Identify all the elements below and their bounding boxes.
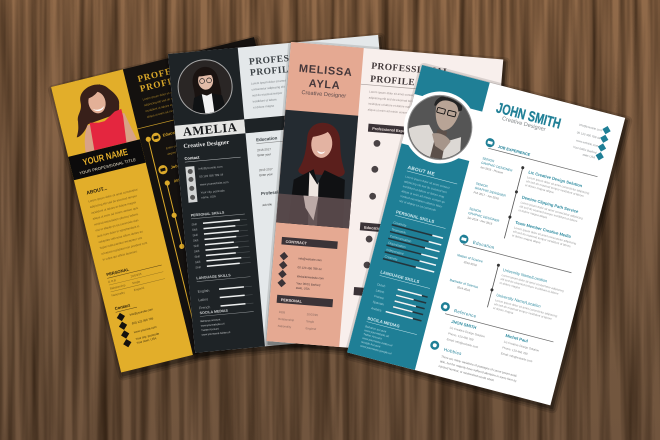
about me: nostrud exercitation ullamco labor <box>400 194 443 209</box>
about block: Lorem ipsum dolor sit amet consectetur <box>88 187 138 203</box>
contact block: (00) 123 456 789 <box>131 316 154 326</box>
timeline: 2016 <box>174 178 182 183</box>
reference block: Lic Creative Design Solution <box>503 340 540 353</box>
shadow: John Smith resume <box>349 68 627 408</box>
contact icons and text: www.website.com <box>576 138 599 148</box>
portrait: man with glasses <box>407 94 472 160</box>
timeline <box>145 127 232 344</box>
name heading: MELISSA <box>298 63 353 79</box>
contact icons and text: Your 00/01 Barford <box>573 145 597 155</box>
contact block: Your city, postcode <box>201 188 225 195</box>
shadow: Amelia resume <box>170 38 407 356</box>
personal band: 20/03/95 <box>307 312 319 317</box>
personal block: D.O.B <box>108 278 116 284</box>
about block: ABOUT... <box>86 185 109 197</box>
job timeline: Lic Creative Design Solution <box>528 169 583 188</box>
personal block: Relationship <box>109 283 126 291</box>
reference block: Phone: 123 456 789 <box>502 345 528 356</box>
about me: Lorem ipsum dolor sit amet consect <box>405 174 450 190</box>
profile heading: PROFILE <box>250 65 296 79</box>
job timeline: Lorem ipsum dolor sit amet consectetur adipiscing <box>520 200 584 221</box>
reference block: JHON SMITH <box>451 319 477 330</box>
contact icons and text: info@yoursite.com <box>579 123 603 133</box>
job timeline: elit sed do eiusmod tempor incididunt ut labore <box>519 204 578 223</box>
timeline bands and dots <box>353 124 428 300</box>
name heading: Creative Designer <box>301 90 346 100</box>
about me: aliqua ut enim ad minim veniam qu <box>401 189 446 204</box>
contact list: Website/website.com <box>297 274 325 281</box>
about block: in culpa qui officia deserunt. <box>102 249 138 262</box>
contact block: info@yoursite.com <box>198 164 223 171</box>
education block <box>256 132 322 207</box>
contract band: CONTRACT <box>285 240 308 246</box>
job timeline: Lorem ipsum dolor sit amet consectetur adipiscing <box>514 226 577 246</box>
personal skills: Skill <box>194 254 200 259</box>
contact block: 00 123 456 789 44 <box>199 172 224 179</box>
job timeline <box>464 156 592 256</box>
profile heading: consectetur adipiscing elit <box>251 85 285 92</box>
social medias <box>360 316 418 361</box>
about me <box>399 165 459 216</box>
language skills: France <box>374 294 385 300</box>
about block: adipiscing elit sed do eiusmod tempor <box>89 194 137 209</box>
profile heading: PROFILE <box>370 75 415 88</box>
language skills: Latino <box>198 297 208 302</box>
personal band <box>275 295 333 332</box>
portrait: woman in red dress <box>76 84 137 152</box>
about block: occaecat cupidatat non proident sunt <box>101 241 148 256</box>
about block <box>86 179 152 262</box>
education block: 2016-2017 <box>259 167 273 172</box>
timeline: Job <box>170 163 179 170</box>
social medias: Behance account <box>365 324 387 334</box>
profile heading: incididunt ut labore <box>252 97 277 104</box>
hobbies block <box>425 340 522 388</box>
social medias: Behance account <box>200 317 221 323</box>
shadow: Melissa resume <box>268 45 505 361</box>
about block: aute irure dolor in reprehenderit in <box>96 224 140 238</box>
job timeline: SENIOR <box>469 207 482 214</box>
teal column <box>344 64 490 370</box>
personal skills <box>383 209 447 273</box>
contact list: 00 123 456 789 44 <box>297 265 322 271</box>
personal band: Nationality <box>278 324 292 329</box>
personal skills: Teamwork <box>391 227 407 235</box>
panel: yellow resume <box>51 37 256 372</box>
contact block: www.yourwebsite.com <box>200 180 229 187</box>
hobbies block: able, but the majority have suffered alteration in some form by <box>439 359 518 383</box>
about block: voluptate velit esse cillum dolore eu <box>98 229 144 244</box>
profile heading: Lorem ipsum dolor sit amet <box>251 78 286 86</box>
name band <box>175 107 386 140</box>
profile heading: PROFESSIONAL <box>249 50 329 68</box>
reference block: Lic Creative Design Solution <box>449 326 486 339</box>
job timeline: GRAPHIC DESIGNER <box>468 211 500 223</box>
portrait circle <box>178 59 233 114</box>
social medias: www.yourname.google.url <box>360 344 392 356</box>
education block: Professional <box>261 189 288 196</box>
profile heading: incididunt ut labore et dolore magna <box>368 102 415 109</box>
job timeline: elit sed do eiusmod tempor incididunt ut labore <box>526 179 585 198</box>
profile heading: PROFESSIONAL <box>136 55 218 84</box>
job timeline: elit sed do eiusmod tempor incididunt ut labore <box>513 229 572 248</box>
name band: AMELIA <box>182 120 238 139</box>
language skills: Latino <box>375 288 385 294</box>
subtitle: Creative Designer <box>183 140 230 150</box>
personal skills: Skill <box>195 260 201 264</box>
reference block: Email: info@website.com <box>446 337 479 349</box>
about block: aliqua ut enim ad minim veniam quis <box>92 206 139 221</box>
job timeline: et dolore magna aliqua <box>525 183 554 194</box>
hobbies block: Hobbies <box>443 347 463 356</box>
contact block: Your city, postcode <box>135 331 160 341</box>
profile heading: et dolore magna <box>253 104 275 109</box>
personal skills: Skill <box>191 222 197 227</box>
social medias: Google Account <box>361 340 381 349</box>
personal block: 20/03/95 <box>130 272 142 278</box>
profile heading: incididunt ut labore et dolore magna <box>145 98 191 113</box>
personal band: England <box>305 326 317 331</box>
profile heading <box>249 50 333 109</box>
about me: adipiscing elit sed do eiusmod tem <box>404 179 448 194</box>
about block: nisi ut aliquip ex ea commodo duis <box>95 218 139 232</box>
contact block: Your town, USA <box>136 336 157 345</box>
language skills: English <box>197 289 210 294</box>
hobbies block: injected humour, or randomised words which <box>438 364 495 382</box>
contact block: name, USA <box>201 194 216 200</box>
timeline bands and dots: Education <box>364 226 383 231</box>
social medias <box>199 306 256 337</box>
timeline: degree here <box>167 148 183 156</box>
personal skills: Skill <box>192 227 198 232</box>
hobbies block: There are many variations of passages of Lorem Ipsum avail- <box>441 354 518 378</box>
education timeline: University Name/Location <box>496 292 541 309</box>
personal skills: Organisation <box>388 241 406 249</box>
social medias: Twitter Account <box>363 332 382 341</box>
job timeline: Demion Clipping Path Service <box>521 195 580 214</box>
personal skills: Skill <box>194 249 200 253</box>
personal block: Single <box>132 279 141 285</box>
language skills <box>196 271 254 310</box>
about block: incididunt ut labore et dolore magna <box>91 200 137 215</box>
personal skills: Independent <box>386 248 404 256</box>
social medias: SOCILA MEDIAS <box>367 316 400 329</box>
about block: nostrud exercitation ullamco laboris <box>94 212 139 227</box>
personal skills: PERSONAL SKILLS <box>396 209 435 224</box>
reference block: Michel Paul <box>505 333 528 344</box>
job timeline: SENIOR <box>475 181 489 189</box>
profile heading: PROFILE <box>139 73 186 94</box>
education timeline: University Name/Location <box>502 267 548 283</box>
job timeline: et dolore magna aliqua <box>512 233 541 245</box>
portrait: red-haired woman <box>276 110 358 228</box>
contact icons and text <box>571 119 612 162</box>
job timeline: Team Member Creative Media <box>515 220 572 239</box>
timeline: Enter your <box>165 143 179 150</box>
personal block <box>106 259 166 298</box>
social medias: www.yourname.twitter.url <box>201 330 231 337</box>
job timeline: Jan 2015 - Dec 2016 <box>467 215 493 226</box>
contact list: info@website.com <box>298 256 323 262</box>
job timeline: GRAPHIC DESIGNER <box>481 161 514 173</box>
social medias: www.yourwebsite.url <box>364 328 390 338</box>
profile heading: Lorem ipsum dolor sit amet consectetur <box>142 85 192 101</box>
education block: Job title <box>262 202 273 207</box>
education heading: Education <box>472 240 495 250</box>
contact icons and text: state USA <box>582 152 596 160</box>
about block: fugiat nulla pariatur excepteur sint <box>99 236 143 250</box>
education timeline: et dolore magna <box>499 281 521 290</box>
education heading <box>458 234 574 273</box>
profile heading: sed do eiusmod tempor <box>252 91 282 98</box>
name heading: AYLA <box>308 78 341 92</box>
social medias: www.yourwebsite.url <box>201 321 225 328</box>
personal band: Single <box>306 319 315 324</box>
contact block: info@yoursite.com <box>129 307 154 317</box>
personal skills: PERSONAL SKILLS <box>191 211 225 218</box>
contact block: www.yoursite.com <box>133 325 158 334</box>
profile heading <box>368 62 450 118</box>
panel: John Smith resume <box>344 64 625 405</box>
language skills: Dutch <box>377 282 386 288</box>
language skills: LANGUAGE SKILLS <box>380 269 420 284</box>
personal block: Nationality <box>111 290 126 298</box>
job timeline: Jan 2016 - Present <box>480 165 504 175</box>
language skills <box>371 269 432 323</box>
panel: Melissa resume <box>266 42 503 358</box>
personal block: PERSONAL <box>106 267 130 277</box>
job experience heading: JOB EXPERIENCE <box>497 145 531 157</box>
profile heading: adipiscing elit sed do eiusmod tempor <box>144 92 192 107</box>
profile heading: aliqua ut enim ad minim veniam <box>368 108 409 115</box>
contact block: Contact <box>184 155 200 161</box>
education timeline: et dolore magna <box>493 306 514 315</box>
job experience heading <box>484 137 600 177</box>
contact block <box>184 151 244 203</box>
profile heading: PROFESSIONAL <box>371 62 450 78</box>
name heading: Creative Designer <box>501 116 546 133</box>
job timeline: GRAPHIC DESIGNER <box>474 186 507 198</box>
contact block: Contact <box>114 302 131 311</box>
personal skills: Skill <box>195 265 201 270</box>
reference block: Reference <box>454 308 477 319</box>
personal band: PERSONAL <box>281 298 303 304</box>
job timeline: Lorem ipsum dolor sit amet consectetur adipiscing <box>527 175 590 195</box>
education timeline: Master of Science <box>457 253 483 264</box>
education timeline: elit sed do eiusmod tempor incididunt ut labore <box>494 302 553 321</box>
language skills: Spanish <box>372 300 385 307</box>
shadow: yellow resume <box>53 40 326 375</box>
about me: ABOUT ME <box>407 165 436 178</box>
name band: YOUR NAME <box>82 147 129 167</box>
reference block: Email: info@website.com <box>500 351 533 363</box>
contact icons and text: 00 123 456 789 44 <box>576 130 601 140</box>
language skills: French <box>199 305 210 310</box>
language skills: Arabics <box>371 306 382 313</box>
personal block: England <box>133 286 145 292</box>
language skills: LANGUAGE SKILLS <box>196 273 231 280</box>
timeline: Education <box>162 128 183 138</box>
job timeline: SENIOR <box>482 156 495 163</box>
about me: nisi ut aliquip ex ea commodo <box>399 199 437 212</box>
social medias: www.yourname.twitter.url <box>362 336 393 348</box>
personal skills: Communication <box>389 234 412 243</box>
name band: YOUR PROFESSIONAL TITLE <box>79 157 137 176</box>
education block: Enter your <box>257 152 271 157</box>
education timeline: 2016-2018 <box>463 260 478 267</box>
reference block <box>433 301 556 367</box>
personal skills: Creativity <box>393 220 407 228</box>
personal skills: Skill <box>192 233 198 237</box>
personal skills: Skill <box>193 238 199 243</box>
education timeline: Bachelor of Science <box>449 278 479 289</box>
education timeline: Lorem ipsum dolor sit amet consectetur adipiscing <box>495 298 558 318</box>
contact list <box>277 252 326 292</box>
about me: incididunt ut labore et dolore mag <box>402 184 445 199</box>
education timeline: 2014-2016 <box>457 285 471 292</box>
education block: Enter your <box>259 172 273 177</box>
personal band: Relationship <box>278 317 295 322</box>
personal skills <box>191 209 251 270</box>
social medias: SOCILA MEDIAS <box>199 309 229 315</box>
job timeline: Feb 2017 - Jun 2018 <box>473 190 500 201</box>
contract band <box>281 237 338 249</box>
profile heading: Lorem ipsum dolor sit amet consectetur <box>369 90 420 98</box>
profile heading: adipiscing elit sed do eiusmod tempor <box>369 96 417 104</box>
contact block <box>114 297 161 348</box>
reference block: Phone: 123 456 789 <box>448 331 474 342</box>
name band <box>68 139 146 180</box>
education timeline <box>445 253 567 326</box>
education block: 2016-2017 <box>257 147 271 152</box>
personal skills: Skill <box>193 244 199 248</box>
education block: Education <box>256 135 278 142</box>
name heading <box>297 63 353 100</box>
profile heading <box>125 45 269 129</box>
contact list: Your 00/01 Barford <box>296 281 321 287</box>
panel: Amelia resume <box>168 34 380 353</box>
job timeline: et dolore magna aliqua <box>518 208 548 219</box>
contact list: state, USA <box>296 286 310 291</box>
name heading: JOHN SMITH <box>495 100 562 133</box>
personal band: DOB <box>279 310 285 314</box>
social medias: Twitter Account <box>201 327 219 332</box>
personal skills: Creativity <box>384 254 398 262</box>
timeline bands and dots: Professional Experience <box>372 127 416 134</box>
education timeline: elit sed do eiusmod tempor incididunt ut labore <box>500 277 559 296</box>
profile heading: aliqua ut enim ad minim veniam <box>146 105 187 119</box>
education timeline: Lorem ipsum dolor sit amet consectetur adipiscing <box>501 273 565 293</box>
